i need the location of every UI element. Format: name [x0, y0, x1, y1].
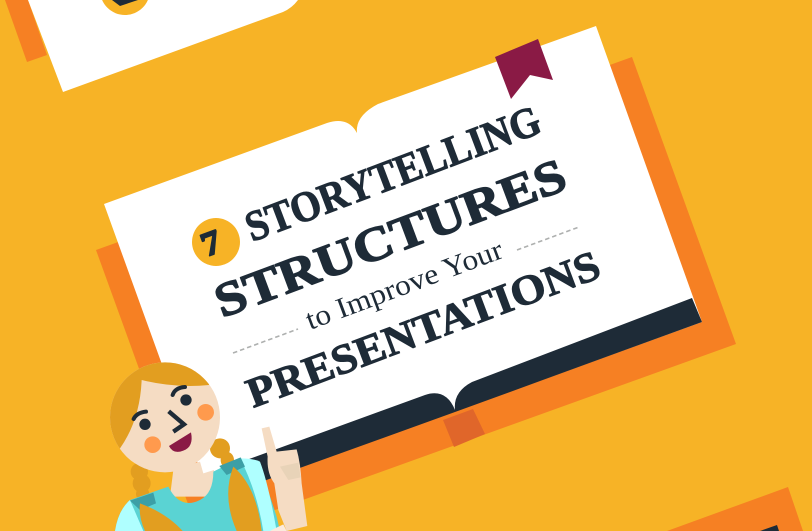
- dark page edge band: [197, 298, 702, 500]
- next book fragment at bottom right: [667, 487, 803, 531]
- number badge: [192, 218, 240, 266]
- book cover back: [96, 57, 736, 531]
- heading: presentations: PRESENTATIONS: [240, 243, 607, 417]
- dashed rule left: [233, 329, 298, 353]
- previous book fragment at top: [5, 0, 298, 92]
- mouth: [169, 432, 192, 452]
- open book pages: [104, 26, 702, 500]
- bookmark: [495, 39, 553, 99]
- nose: [169, 411, 184, 432]
- eyebrows: [134, 387, 185, 419]
- number badge: 7: [196, 223, 227, 265]
- neck: [170, 462, 217, 497]
- dashed rule right: [517, 227, 579, 250]
- front braids: [140, 467, 262, 531]
- hand and arm: [262, 427, 307, 531]
- back braids: [131, 438, 234, 501]
- title: [192, 97, 607, 417]
- cheeks: [144, 404, 214, 453]
- book spine shadow: [443, 409, 485, 447]
- heading: structures: STRUCTURES: [207, 149, 573, 328]
- shirt: [115, 458, 280, 531]
- heading: storytelling: STORYTELLING: [239, 97, 547, 251]
- subheading: to Improve Your: [301, 234, 508, 337]
- eyes: [139, 394, 192, 430]
- head: [110, 362, 220, 472]
- hair ties: [130, 457, 245, 510]
- character: girl pointing: [103, 353, 307, 531]
